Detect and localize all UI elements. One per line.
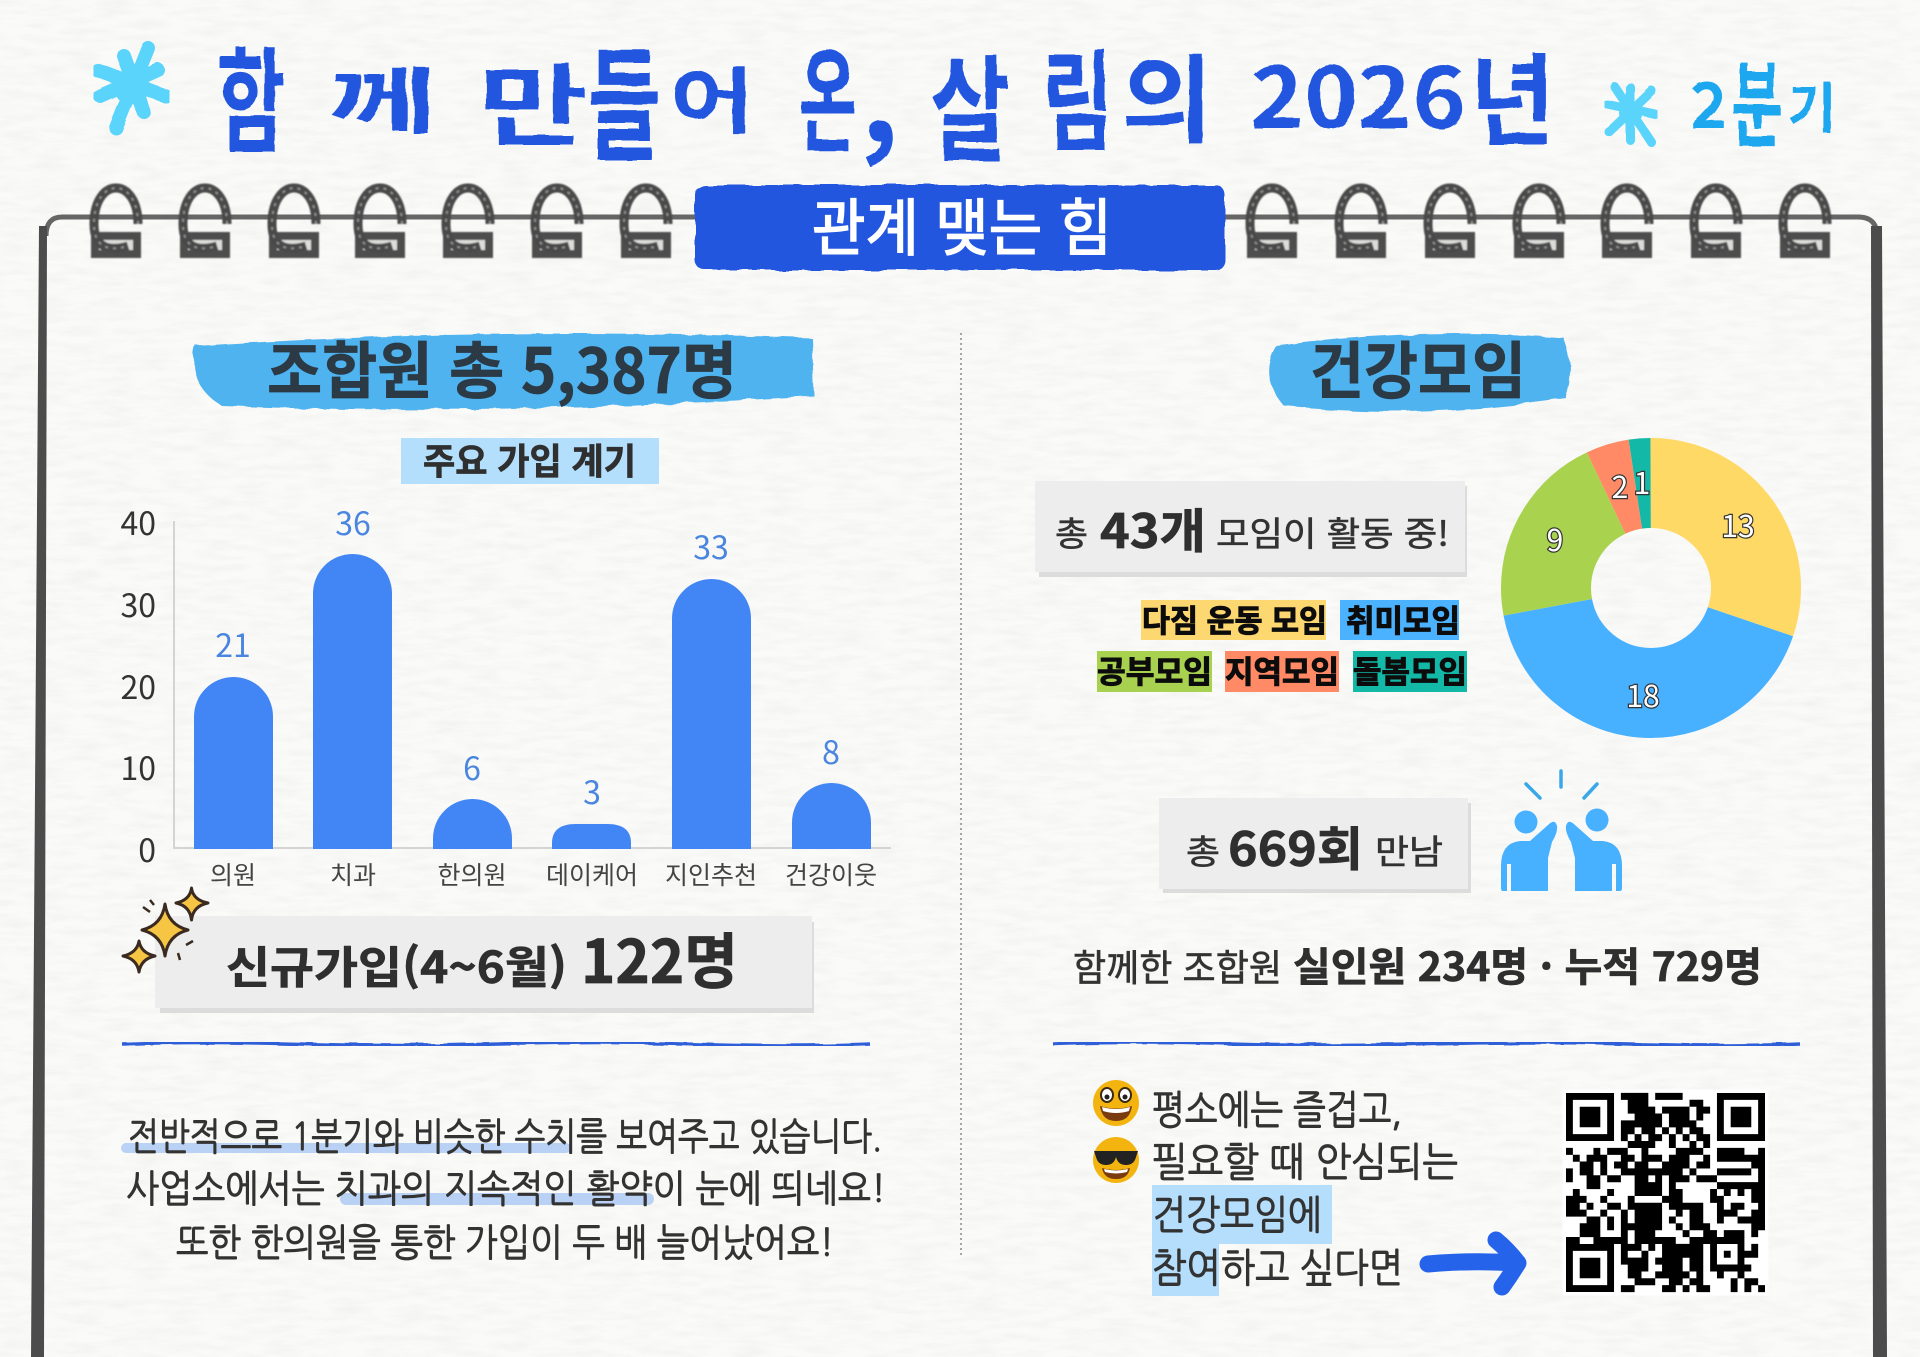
y axis labels: 30 [120, 581, 156, 627]
value labels: 6 [463, 744, 481, 790]
category labels: 지인추천 [665, 856, 757, 892]
title: 온 [799, 11, 857, 176]
y axis labels: 0 [138, 826, 156, 872]
summary text with highlights: 또한 한의원을 통한 가입이 두 배 늘어났어요! [176, 1224, 834, 1262]
title [217, 2, 1555, 186]
summary text with highlights: 전반적으로 1분기와 비슷한 수치를 보여주고 있습니다. [128, 1118, 882, 1156]
quarter label: 2 [1690, 56, 1727, 146]
title: 살 [930, 19, 1010, 184]
callout: 669 meetings: 총 [1186, 825, 1220, 874]
donut chart: 18 [1626, 672, 1660, 716]
icon: right asterisk star [1607, 86, 1655, 143]
dotted centre divider [960, 333, 962, 1255]
chart title: 주요 가입 계기 [423, 433, 636, 485]
legend: 지역모임 [1225, 647, 1339, 692]
callout: 43 groups [1035, 481, 1467, 577]
legend: 공부모임 [1097, 647, 1212, 692]
title: 만 [478, 35, 587, 164]
panel: left membership [120, 321, 891, 1262]
title: 년 [1470, 21, 1555, 166]
icon: sparkles [123, 888, 208, 972]
title: 림 [1042, 16, 1113, 173]
bars [194, 554, 871, 849]
quarter label: 기 [1788, 64, 1836, 144]
QR code [1563, 1090, 1768, 1295]
donut chart: 1 [1634, 459, 1650, 503]
summary text with highlights [121, 1118, 886, 1262]
category labels: 치과 [330, 856, 376, 892]
legend: 취미모임 [1346, 596, 1460, 641]
donut chart: 13 [1721, 502, 1755, 546]
wavy divider right [1053, 1042, 1800, 1046]
donut chart [1546, 459, 1756, 716]
title: 의 [1121, 24, 1213, 163]
heading: 건강모임: 건강모임 [1310, 321, 1526, 411]
title: 어 [670, 43, 754, 148]
callout: 43 groups: 43개 [1100, 493, 1206, 562]
legend [1097, 596, 1467, 692]
callout: 669 meetings: 669회 [1228, 811, 1363, 880]
y axis labels: 40 [120, 499, 156, 545]
title: 2026 [1250, 32, 1466, 153]
callout: new members: 122명 [581, 914, 738, 1001]
category labels [210, 856, 877, 892]
bar chart: join reasons [120, 499, 891, 892]
invitation text with highlight: 참여하고 싶다면 [1152, 1248, 1403, 1288]
category labels: 한의원 [437, 856, 507, 892]
callout: 43 groups: 총 [1055, 507, 1088, 556]
category labels: 데이케어 [546, 856, 638, 892]
callout: 669 meetings [1159, 798, 1471, 893]
callout: 43 groups: 모임이 활동 중! [1216, 507, 1449, 556]
invitation text with highlight [1152, 1090, 1458, 1296]
icon: left asterisk star [97, 48, 166, 128]
value labels: 36 [335, 499, 371, 545]
stat line: participants: 함께한 조합원 [1073, 938, 1282, 992]
title: , [860, 2, 899, 176]
callout: new members [155, 914, 814, 1013]
stat line: participants: 실인원 234명 · 누적 729명 [1293, 935, 1762, 993]
spiral binding rings [94, 188, 1827, 254]
category labels: 의원 [210, 856, 256, 892]
heading: total members: 조합원 총 5,387명 [267, 321, 737, 411]
invitation text with highlight: 건강모임에 [1152, 1195, 1322, 1235]
icon: grinning emoji [1093, 1080, 1139, 1126]
y axis labels: 20 [120, 663, 156, 709]
title: 들 [587, 9, 661, 186]
y axis labels [120, 499, 156, 872]
donut chart: 2 [1612, 463, 1628, 507]
legend: 돌봄모임 [1353, 647, 1467, 692]
highlight strokes [121, 1143, 654, 1205]
icon: sunglasses emoji [1093, 1137, 1139, 1183]
banner: 관계 맺는 힘: 관계 맺는 힘 [812, 178, 1112, 268]
invitation text with highlight: 평소에는 즐겁고, [1152, 1090, 1402, 1130]
wavy divider left [122, 1042, 870, 1046]
donut chart: 9 [1547, 516, 1563, 560]
value labels: 33 [693, 523, 729, 569]
value labels: 8 [822, 728, 840, 774]
quarter label: 분 [1732, 30, 1782, 167]
title: 함 [217, 11, 286, 176]
arrow [1428, 1240, 1518, 1287]
highlight blocks [1152, 1185, 1332, 1296]
value labels [215, 499, 840, 814]
banner: 관계 맺는 힘 [695, 178, 1225, 270]
quarter label [1690, 30, 1836, 167]
callout: new members: 신규가입(4~6월) [226, 932, 567, 996]
invitation text with highlight: 필요할 때 안심되는 [1152, 1142, 1458, 1182]
y axis labels: 10 [120, 744, 156, 790]
stat line: participants [1073, 935, 1762, 993]
callout: 669 meetings: 만남 [1375, 825, 1443, 874]
value labels: 21 [215, 621, 251, 667]
legend: 다짐 운동 모임 [1142, 596, 1327, 641]
summary text with highlights: 사업소에서는 치과의 지속적인 활약이 눈에 띄네요! [126, 1170, 886, 1208]
panel: right health groups [1035, 321, 1800, 1296]
category labels: 건강이웃 [785, 856, 877, 892]
title: 께 [329, 43, 437, 148]
icon: high five [1501, 771, 1622, 891]
value labels: 3 [583, 768, 601, 814]
